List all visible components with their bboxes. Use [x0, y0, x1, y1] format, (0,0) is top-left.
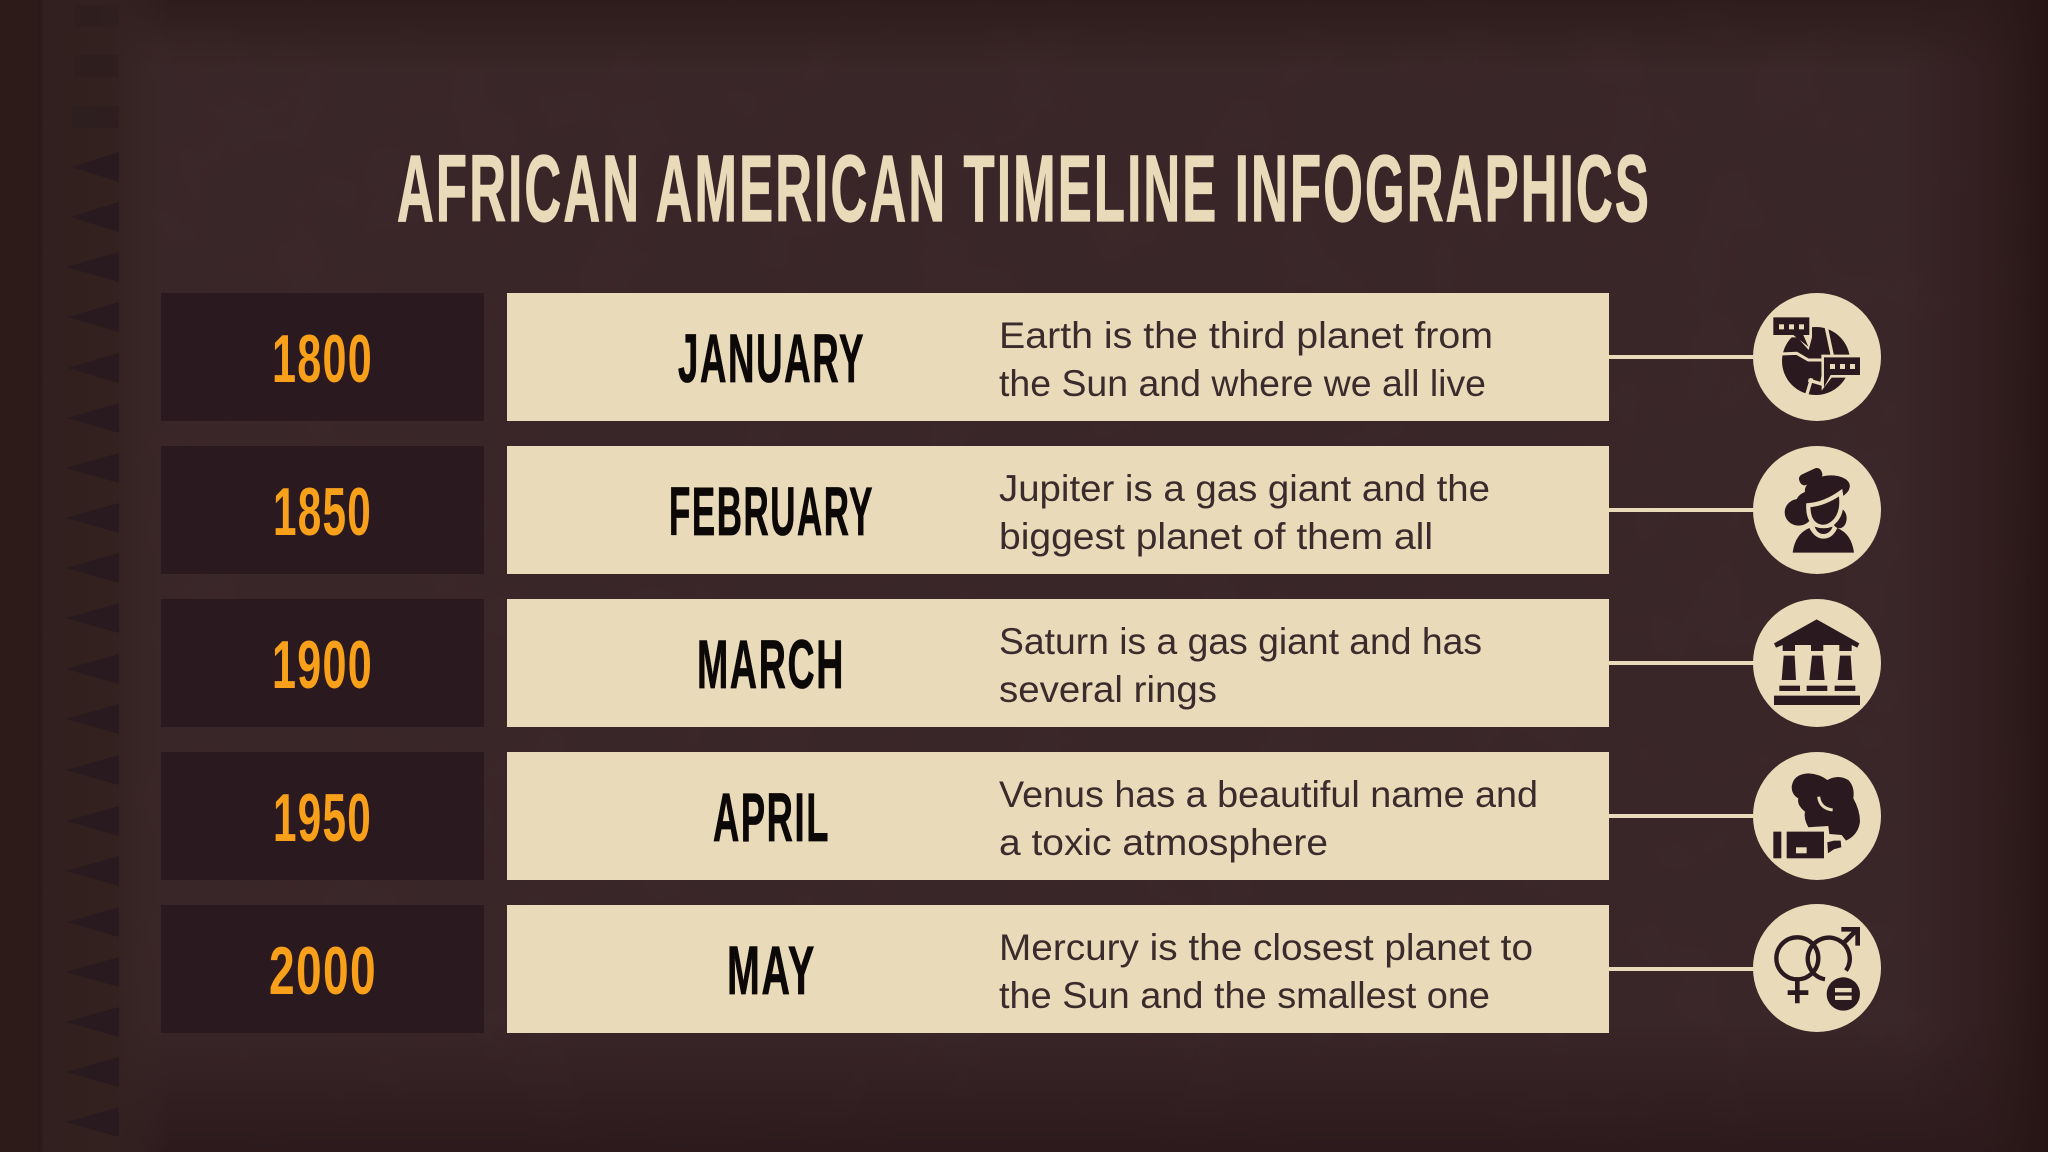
row 2: 1850 February [161, 446, 1881, 574]
description January [999, 315, 1493, 404]
year label 1950: 1950 [273, 780, 372, 856]
description March: Saturn is a gas giant and has [999, 621, 1482, 662]
month label May: MAY [727, 932, 816, 1009]
content panel April [507, 752, 1609, 880]
description February [999, 468, 1490, 557]
year panel 1900 [161, 599, 484, 727]
row 5: 2000 May [161, 904, 1881, 1033]
description May: the Sun and the smallest one [999, 975, 1490, 1016]
icon: temple [1753, 599, 1881, 727]
description February: biggest planet of them all [999, 516, 1433, 557]
content panel March [507, 599, 1609, 727]
decorative triangle border [66, 5, 119, 1137]
month label January: JANUARY [678, 320, 865, 397]
content panel February [507, 446, 1609, 574]
row 4: 1950 April [161, 752, 1881, 880]
connector 2 [1608, 508, 1758, 512]
year label 1850: 1850 [273, 474, 372, 550]
description April [999, 774, 1538, 863]
description March [999, 621, 1482, 710]
description April: a toxic atmosphere [999, 822, 1328, 863]
connector 3 [1608, 661, 1758, 665]
description May: Mercury is the closest planet to [999, 927, 1533, 968]
icon: globe with speech bubbles [1753, 293, 1881, 421]
description March: several rings [999, 669, 1217, 710]
description April: Venus has a beautiful name and [999, 774, 1538, 815]
content panel May [507, 905, 1609, 1033]
year panel 1800 [161, 293, 484, 421]
year panel 1850 [161, 446, 484, 574]
year label 2000: 2000 [269, 933, 377, 1009]
content panel January [507, 293, 1609, 421]
year label 1900: 1900 [272, 627, 373, 703]
year panel 2000 [161, 905, 484, 1033]
connector 4 [1608, 814, 1758, 818]
row 1: 1800 January [161, 293, 1881, 421]
icon: camera with smoke [1753, 752, 1881, 880]
year label 1800: 1800 [272, 321, 373, 397]
connector 5 [1608, 967, 1758, 971]
description February: Jupiter is a gas giant and the [999, 468, 1490, 509]
description May [999, 927, 1533, 1016]
month label February: FEBRUARY [669, 473, 874, 550]
icon: gender symbols [1753, 904, 1881, 1032]
description January: the Sun and where we all live [999, 363, 1486, 404]
icon: woman with hat [1753, 446, 1881, 574]
row 3: 1900 March [161, 599, 1881, 727]
description January: Earth is the third planet from [999, 315, 1493, 356]
month label March: MARCH [697, 626, 845, 703]
connector 1 [1608, 355, 1758, 359]
year panel 1950 [161, 752, 484, 880]
month label April: APRIL [713, 779, 830, 856]
